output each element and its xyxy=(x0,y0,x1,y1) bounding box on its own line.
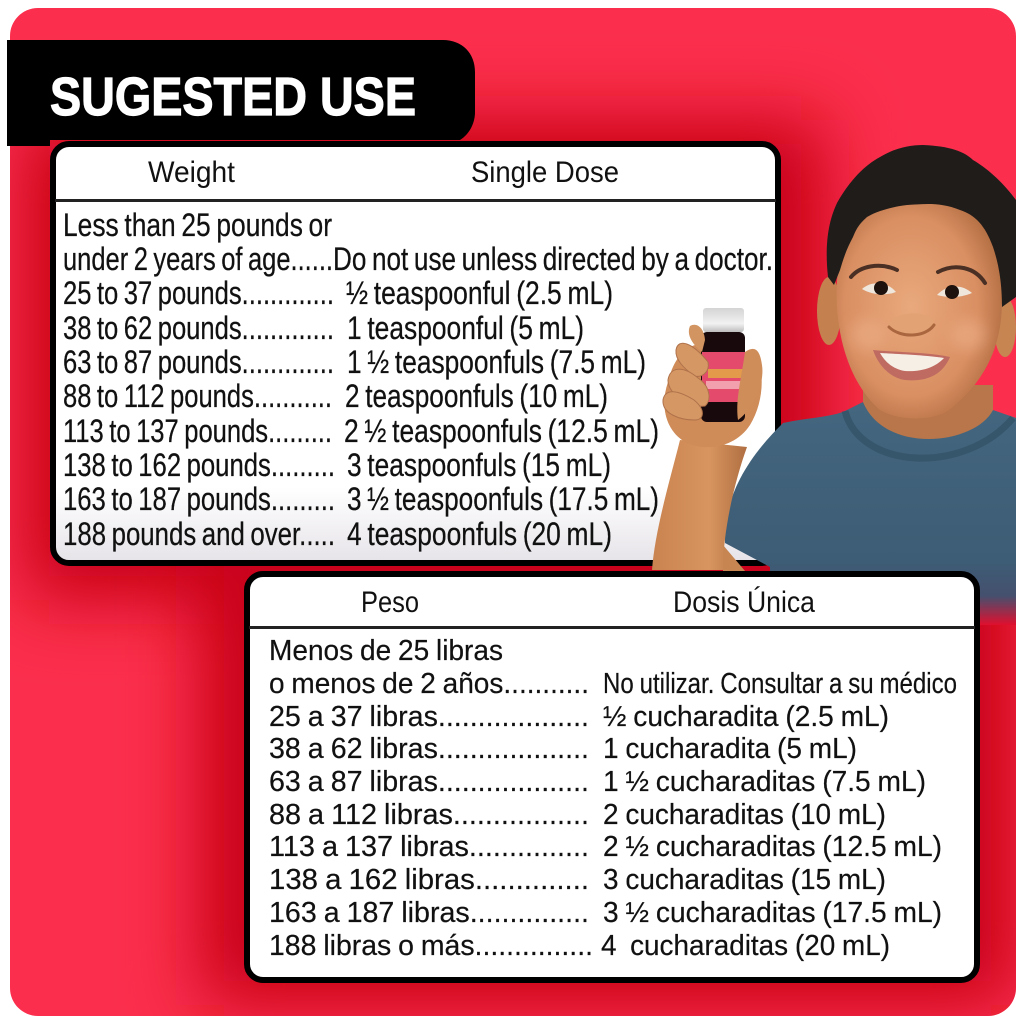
heading: Dosis Única: Dosis Única xyxy=(673,586,815,619)
English dosage rows: 4 teaspoonfuls (20 mL) xyxy=(347,516,612,552)
English dosage rows: 3 ½ teaspoonfuls (17.5 mL) xyxy=(347,481,659,517)
cheek highlights xyxy=(850,319,986,351)
medicine bottle xyxy=(701,308,745,422)
right ear xyxy=(994,297,1016,357)
Spanish dosage rows: ½ cucharadita (2.5 mL) xyxy=(603,701,889,733)
English dosage rows: 38 to 62 pounds............. xyxy=(63,310,334,346)
title text: SUGESTED USE xyxy=(50,67,416,127)
bottle body xyxy=(701,332,745,422)
Spanish dosage rows: 4 cucharaditas (20 mL) xyxy=(601,930,890,962)
Spanish dosage rows: 113 a 137 libras............... xyxy=(269,831,589,863)
Spanish dosage rows: o menos de 2 años........... xyxy=(269,668,589,700)
right eyebrow xyxy=(938,267,985,283)
English dosage rows: 3 teaspoonfuls (15 mL) xyxy=(347,447,611,483)
face xyxy=(837,195,1002,418)
English dosage rows xyxy=(63,207,773,552)
Spanish dosage rows: 163 a 187 libras............... xyxy=(269,897,589,929)
left eye xyxy=(862,281,896,295)
bottle label band xyxy=(708,369,745,378)
English dosage rows: Do not use unless directed by a doctor. xyxy=(333,241,773,277)
English dosage rows: under 2 years of age...... xyxy=(63,241,333,277)
Spanish dosage rows: 188 libras o más............... xyxy=(269,930,593,962)
English dosage rows: 63 to 87 pounds............. xyxy=(63,344,334,380)
thumb xyxy=(737,349,762,420)
bottle cap xyxy=(703,308,744,332)
English dosage rows: Less than 25 pounds or xyxy=(63,207,332,243)
left ear xyxy=(817,277,841,345)
index finger xyxy=(689,325,705,352)
Spanish dosage rows xyxy=(269,635,957,962)
Spanish dosage rows: 3 cucharaditas (15 mL) xyxy=(603,864,886,896)
Spanish dosage rows: 1 cucharadita (5 mL) xyxy=(603,733,857,765)
English dosage rows: 113 to 137 pounds......... xyxy=(63,413,332,449)
right eye xyxy=(937,285,972,299)
heading: Weight: Weight xyxy=(148,156,236,189)
Spanish dosage rows: 63 a 87 libras................... xyxy=(269,766,589,798)
English dosage rows: 1 teaspoonful (5 mL) xyxy=(347,310,584,346)
English dosage rows: ½ teaspoonful (2.5 mL) xyxy=(346,275,613,311)
Spanish dosage rows: Menos de 25 libras xyxy=(269,635,503,667)
English dosage rows: 2 teaspoonfuls (10 mL) xyxy=(345,378,608,414)
English dosage rows: 2 ½ teaspoonfuls (12.5 mL) xyxy=(344,413,659,449)
left eyebrow xyxy=(851,266,897,277)
panel: English dosage table xyxy=(53,144,778,563)
Spanish dosage rows: 3 ½ cucharaditas (17.5 mL) xyxy=(603,897,942,929)
English dosage rows: 25 to 37 pounds............. xyxy=(63,275,334,311)
title banner xyxy=(7,40,475,146)
English dosage rows: 88 to 112 pounds........... xyxy=(63,378,332,414)
English dosage rows: 163 to 187 pounds......... xyxy=(63,481,335,517)
Spanish dosage rows: 1 ½ cucharaditas (7.5 mL) xyxy=(603,766,926,798)
Spanish dosage rows: 2 cucharaditas (10 mL) xyxy=(603,799,886,831)
neck xyxy=(863,385,993,439)
Spanish dosage rows: 88 a 112 libras................. xyxy=(269,799,589,831)
bottle label text block xyxy=(706,381,744,389)
inner arm xyxy=(723,545,745,571)
panel: Spanish dosage table xyxy=(247,574,977,980)
raised arm xyxy=(652,440,747,570)
hand back xyxy=(664,345,762,447)
heading: Peso: Peso xyxy=(361,586,419,619)
English dosage rows: 188 pounds and over..... xyxy=(63,516,335,552)
teeth xyxy=(880,353,944,371)
nose shadow xyxy=(889,325,934,335)
nose xyxy=(888,313,934,337)
shirt xyxy=(725,402,1016,625)
bottle label xyxy=(702,352,745,402)
Spanish dosage rows: 25 a 37 libras................... xyxy=(269,701,589,733)
hair xyxy=(827,145,1016,307)
heading: Single Dose: Single Dose xyxy=(471,156,619,189)
English dosage rows: 138 to 162 pounds......... xyxy=(63,447,335,483)
Spanish dosage rows: 138 a 162 libras.............. xyxy=(269,864,589,896)
fingers xyxy=(663,343,709,420)
Spanish dosage rows: 38 a 62 libras................... xyxy=(269,733,589,765)
English dosage rows: 1 ½ teaspoonfuls (7.5 mL) xyxy=(347,344,646,380)
shirt collar xyxy=(845,411,1013,458)
Spanish dosage rows: 2 ½ cucharaditas (12.5 mL) xyxy=(603,831,942,863)
boy holding bottle xyxy=(652,145,1016,625)
smile xyxy=(873,350,950,380)
Spanish dosage rows: No utilizar. Consultar a su médico xyxy=(603,668,957,700)
